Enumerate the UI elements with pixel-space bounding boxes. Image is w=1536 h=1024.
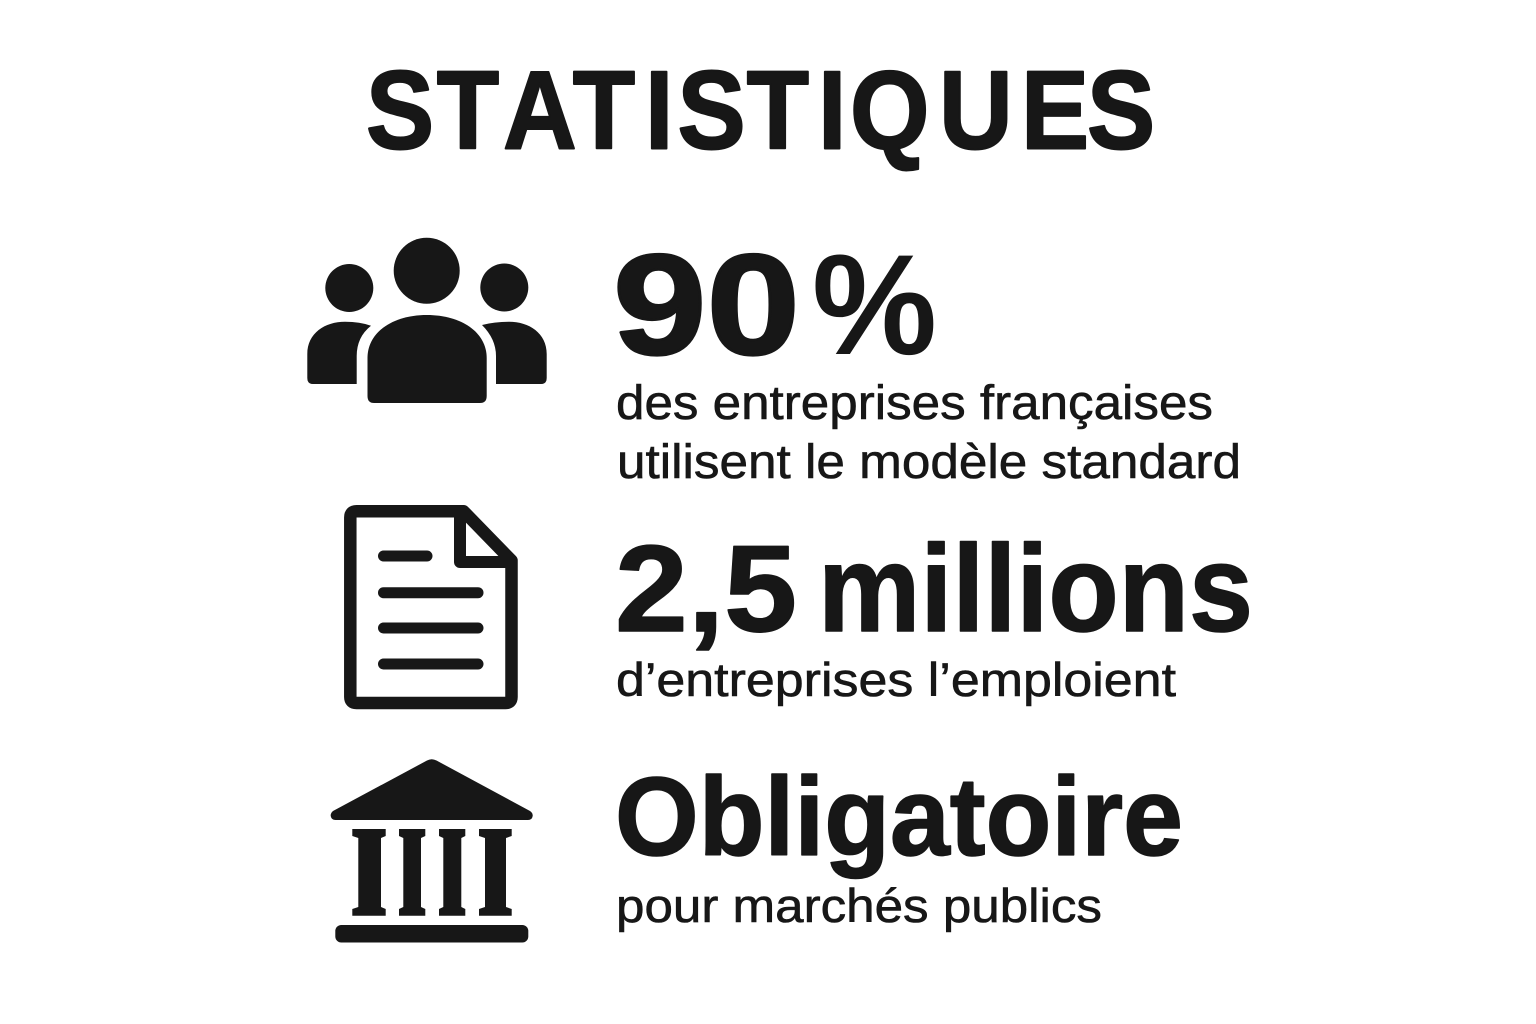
description: mandatory: pour marchés publics: [616, 879, 1102, 932]
description: 90 percent: [616, 377, 1241, 489]
icon: document: [350, 511, 512, 703]
icon: group of people: [307, 238, 547, 403]
panel: mandatory statistic: [331, 755, 1183, 942]
description: 90 percent: des entreprises françaises: [616, 377, 1213, 430]
title: STATISTIQUES: [366, 48, 1155, 172]
big word: millions: millions: [818, 521, 1253, 658]
description: 2.5 million: d’entreprises l’emploient: [616, 653, 1176, 706]
big number: 90: 90: [613, 226, 800, 385]
description: 90 percent: utilisent le modèle standard: [617, 436, 1241, 489]
panel: 90 percent statistic: [307, 226, 1241, 489]
big number: 2,5: 2,5: [615, 521, 797, 658]
panel: 2.5 million statistic: [350, 511, 1253, 706]
icon: public building: [331, 759, 533, 942]
percent sign: %: [812, 226, 937, 385]
big word: Obligatoire: Obligatoire: [615, 755, 1183, 879]
